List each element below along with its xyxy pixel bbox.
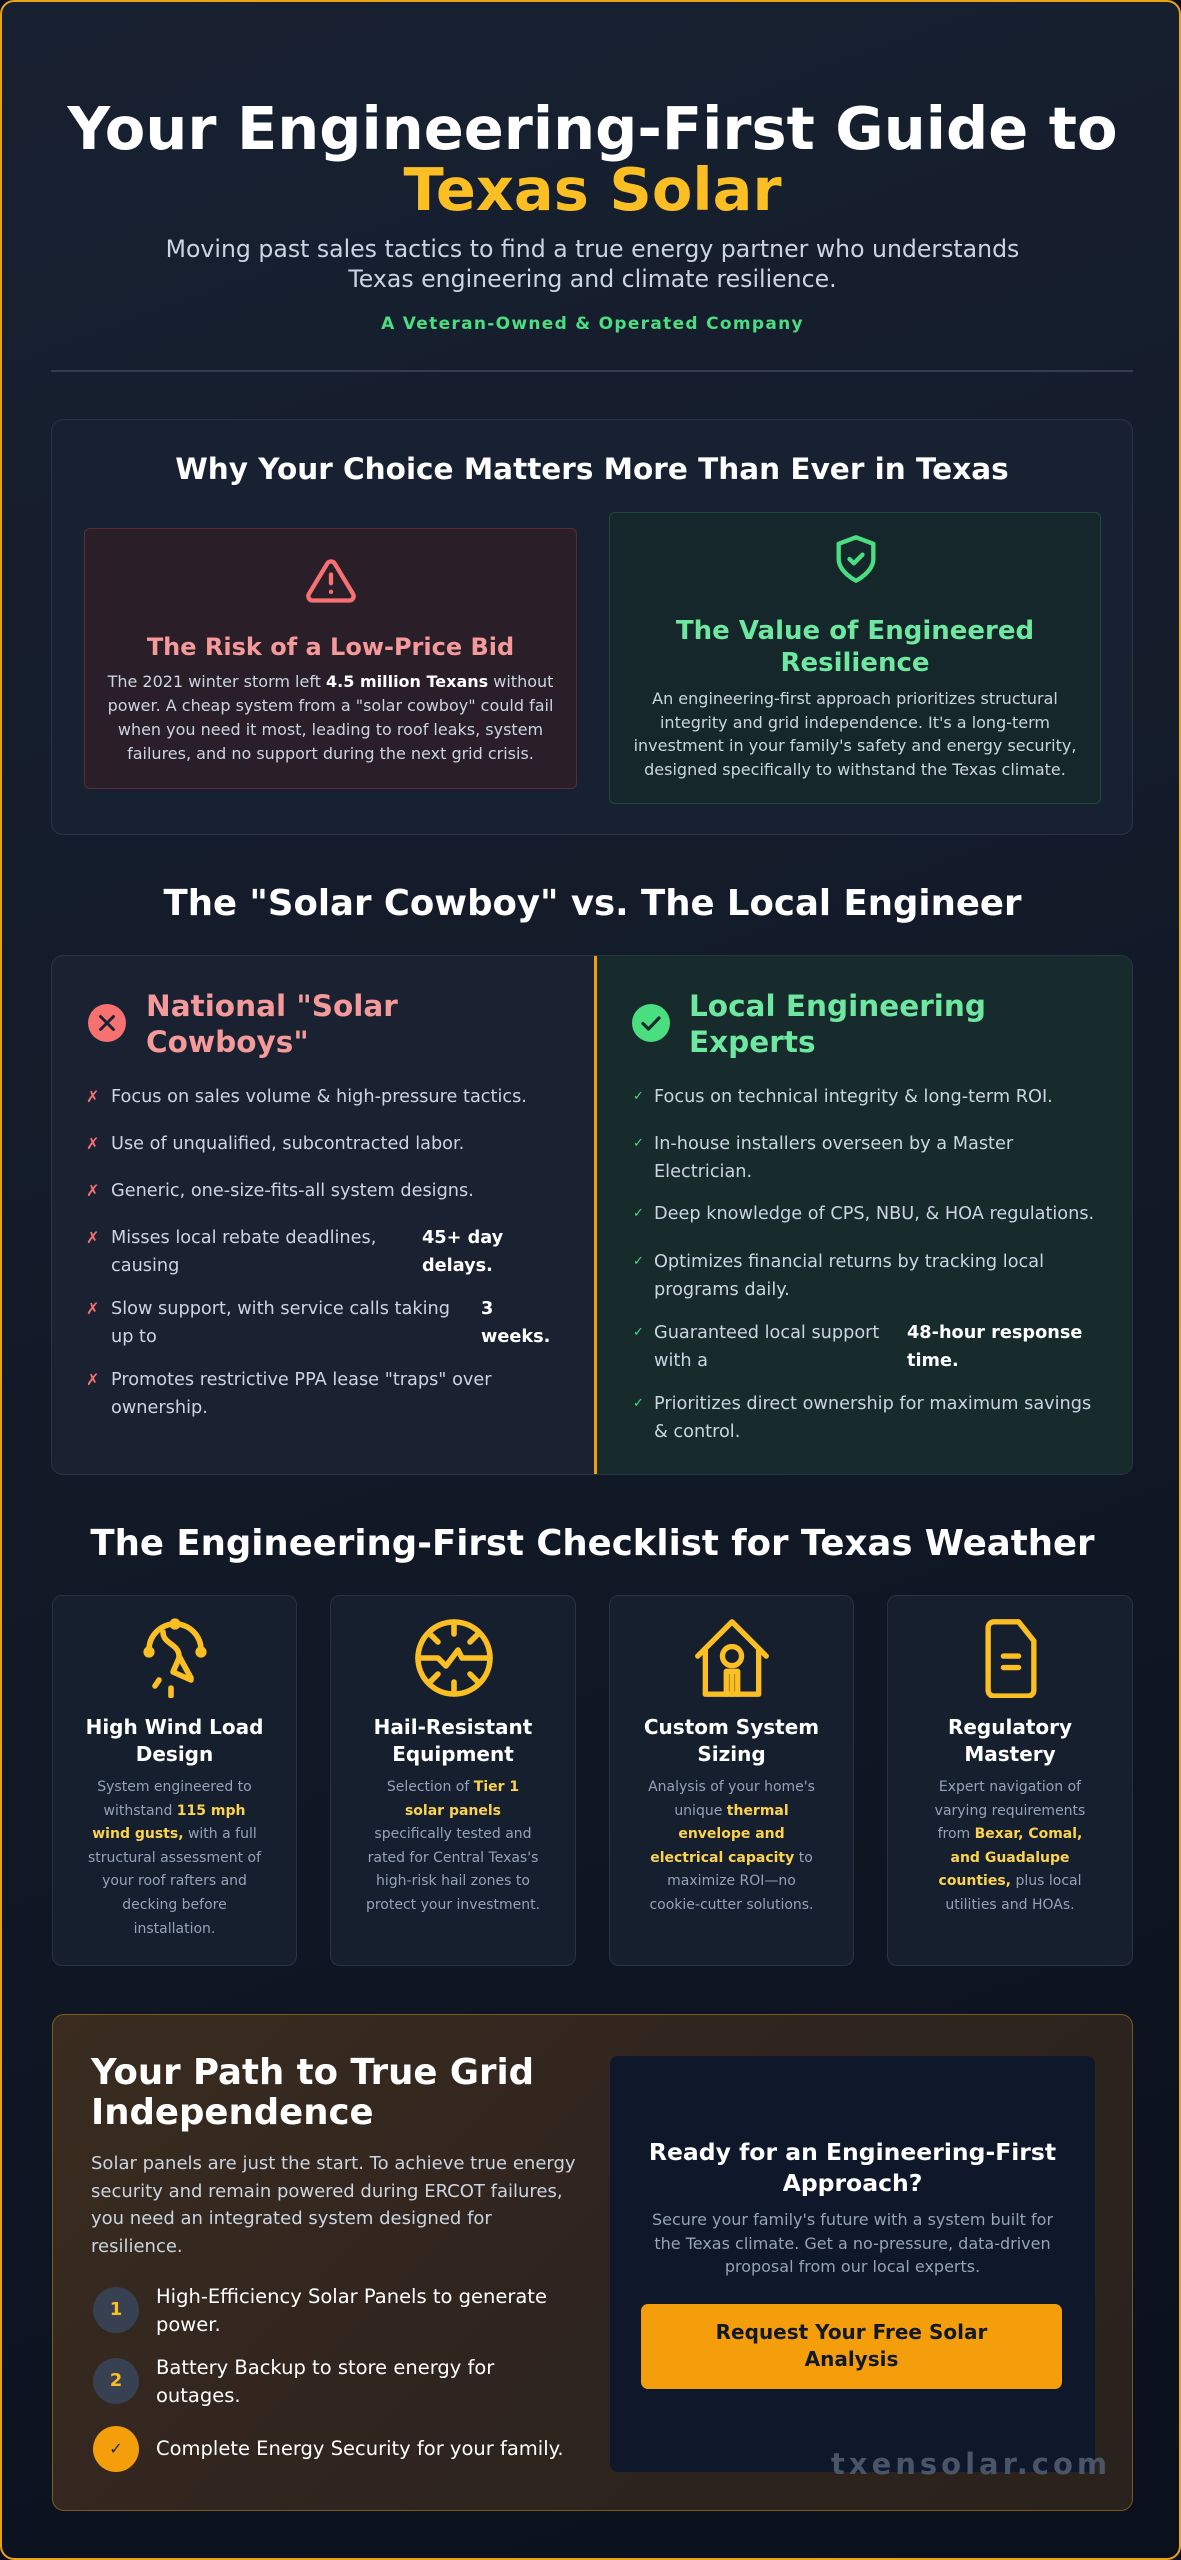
step 2: [93, 2356, 494, 2406]
text: risk: power. A cheap system from a "solar cowboy" could fail: [108, 696, 553, 715]
text: cta: proposal from our local experts.: [725, 2257, 980, 2276]
watermark: txensolar.com: [831, 2447, 1111, 2481]
panel: comparison: [51, 955, 1133, 1475]
title: Your Engineering-First Guide to: [68, 94, 1118, 163]
step 1: power.: [156, 2312, 221, 2336]
panel: why your choice matters: [51, 419, 1133, 835]
text: hail: protect your investment.: [366, 1897, 540, 1913]
text: path intro: you need an integrated system designed for: [91, 2208, 492, 2229]
list: local strengths: ✓: [633, 1089, 644, 1104]
text: wind: your roof rafters and: [102, 1873, 247, 1889]
icon: house: [695, 1619, 769, 1697]
title: wind: High Wind Load: [86, 1715, 263, 1739]
text: sizing: Analysis of your home's: [648, 1779, 815, 1795]
subtitle: Texas engineering and climate resilience.: [348, 265, 837, 293]
icon: warning triangle: [306, 559, 356, 603]
icon: shield check: [836, 535, 876, 583]
list: cowboy faults: Generic, one-size-fits-all system designs.: [111, 1181, 474, 1201]
list: local strengths: Electrician.: [654, 1162, 752, 1182]
list: cowboy faults: Focus on sales volume & high-pressure tactics.: [111, 1087, 527, 1107]
icon: wind: [143, 1618, 207, 1698]
list: cowboy faults: [86, 1087, 550, 1418]
heading: solar cowboy vs local engineer: The "Solar Cowboy" vs. The Local Engineer: [163, 883, 1022, 924]
text: value: [634, 689, 1076, 778]
title: hail: Equipment: [392, 1742, 514, 1766]
step 1: [93, 2285, 547, 2336]
text: hail: [366, 1779, 540, 1913]
text: hail: rated for Central Texas's: [368, 1850, 538, 1866]
heading: value: The Value of Engineered: [676, 616, 1034, 646]
title: sizing: Sizing: [697, 1742, 766, 1766]
list: local strengths: time.: [907, 1351, 959, 1371]
text: wind: structural assessment of: [88, 1850, 261, 1866]
heading: cta: Ready for an Engineering-First: [649, 2138, 1056, 2166]
text: hail: high-risk hail zones to: [376, 1873, 530, 1889]
list: cowboy faults: ownership.: [111, 1398, 208, 1418]
list: cowboy faults: 45+ day: [422, 1228, 503, 1248]
list: local strengths: [633, 1087, 1094, 1442]
title: wind: [86, 1715, 263, 1766]
list: cowboy faults: Slow support, with service calls taking: [111, 1299, 450, 1319]
list: cowboy faults: Promotes restrictive PPA lease "traps" over: [111, 1370, 492, 1390]
list: local strengths: Guaranteed local support: [654, 1323, 879, 1343]
title: hail: Hail-Resistant: [374, 1715, 532, 1739]
text: value: integrity and grid independence. It's a long-term: [660, 712, 1050, 732]
heading: risk: The Risk of a Low-Price Bid: [147, 633, 514, 661]
text: regulatory: from Bexar, Comal,: [938, 1826, 1082, 1842]
text: hail: Selection of Tier 1: [387, 1779, 519, 1795]
button: Analysis: [805, 2347, 898, 2371]
veteran tagline: A Veteran-Owned & Operated Company: [381, 314, 804, 334]
list: cowboy faults: ✗: [86, 1087, 99, 1106]
heading: national cowboys: Cowboys": [146, 1025, 309, 1059]
card: regulatory mastery: [887, 1595, 1133, 1966]
heading: national cowboys: National "Solar: [146, 989, 398, 1023]
step 2: 2: [110, 2370, 122, 2391]
list: cowboy faults: Misses local rebate deadlines,: [111, 1228, 376, 1248]
text: sizing: unique thermal: [674, 1803, 789, 1819]
title: wind: Design: [136, 1742, 213, 1766]
title: sizing: [644, 1715, 819, 1766]
text: regulatory: [935, 1779, 1085, 1913]
title: sizing: Custom System: [644, 1715, 819, 1739]
text: risk: failures, and no support during the next grid crisis.: [127, 744, 534, 763]
title: [67, 94, 1118, 224]
list: cowboy faults: ✗: [86, 1370, 99, 1389]
text: hail: solar panels: [405, 1803, 501, 1819]
step 2: outages.: [156, 2384, 241, 2406]
heading: path: [90, 2052, 534, 2133]
list: local strengths: ✓: [633, 1206, 644, 1221]
list: cowboy faults: Use of unqualified, subcontracted labor.: [111, 1134, 464, 1154]
list: local strengths: programs daily.: [654, 1280, 790, 1300]
panel: path to grid independence: [52, 2014, 1133, 2511]
title: regulatory: Mastery: [964, 1742, 1056, 1766]
text: regulatory: counties, plus local: [939, 1873, 1081, 1889]
step 1: High-Efficiency Solar Panels to generate: [156, 2285, 547, 2308]
title: regulatory: [948, 1715, 1072, 1766]
title: regulatory: Regulatory: [948, 1715, 1072, 1739]
card: risk of low-price bid: [84, 528, 577, 789]
text: sizing: [648, 1779, 815, 1913]
subtitle: [166, 235, 1019, 293]
text: wind: decking before: [122, 1897, 227, 1913]
list: local strengths: ✓: [633, 1136, 644, 1151]
text: value: investment in your family's safety and energy security,: [634, 736, 1076, 755]
text: regulatory: utilities and HOAs.: [945, 1897, 1075, 1913]
text: risk: [108, 672, 553, 763]
list: cowboy faults: causing: [111, 1256, 179, 1276]
button: Request Your Free Solar: [716, 2320, 987, 2344]
text: value: An engineering-first approach prioritizes structural: [652, 689, 1058, 708]
column: local engineering experts: [632, 989, 1094, 1442]
list: local strengths: In-house installers overseen by a Master: [654, 1134, 1013, 1154]
list: local strengths: Prioritizes direct ownership for maximum savings: [654, 1394, 1091, 1414]
list: cowboy faults: ✗: [86, 1228, 99, 1247]
list: local strengths: 48-hour response: [907, 1323, 1082, 1343]
text: regulatory: and Guadalupe: [951, 1850, 1069, 1866]
text: risk: when you need it most, leading to roof leaks, system: [118, 720, 543, 739]
step 3: Complete Energy Security for your family.: [156, 2437, 564, 2460]
heading: local experts: [689, 989, 986, 1059]
heading: why choice matters: Why Your Choice Matters More Than Ever in Texas: [175, 452, 1009, 486]
text: regulatory: varying requirements: [935, 1803, 1085, 1819]
card: high wind load design: [52, 1595, 297, 1966]
step 3: ✓: [109, 2439, 123, 2458]
text: sizing: electrical capacity to: [650, 1850, 813, 1866]
list: cowboy faults: up to: [111, 1327, 157, 1347]
card: hail-resistant equipment: [330, 1595, 576, 1966]
step 1: 1: [110, 2299, 122, 2320]
text: path intro: security and remain powered during ERCOT failures,: [91, 2180, 563, 2202]
list: cowboy faults: ✗: [86, 1181, 99, 1200]
list: cowboy faults: weeks.: [481, 1327, 550, 1347]
icon: document: [985, 1619, 1037, 1698]
icon: green check circle: [632, 1004, 670, 1042]
text: wind: [88, 1779, 262, 1937]
icon: red x circle: [88, 1004, 126, 1042]
text: path intro: Solar panels are just the start. To achieve true energy: [91, 2153, 576, 2174]
list: local strengths: ✓: [633, 1325, 644, 1340]
list: local strengths: & control.: [654, 1422, 740, 1442]
cta card: [610, 2056, 1095, 2472]
text: wind: System engineered to: [97, 1779, 252, 1795]
heading: cta: [649, 2138, 1056, 2197]
list: local strengths: Deep knowledge of CPS, NBU, & HOA regulations.: [654, 1204, 1094, 1224]
heading: national cowboys: [146, 989, 398, 1059]
list: cowboy faults: ✗: [86, 1299, 99, 1318]
list: cowboy faults: ✗: [86, 1134, 99, 1153]
text: cta: [652, 2210, 1054, 2276]
text: value: designed specifically to withstand the Texas climate.: [644, 760, 1066, 778]
text: wind: installation.: [134, 1921, 215, 1937]
text: cta: the Texas climate. Get a no-pressure, data-driven: [654, 2234, 1051, 2252]
text: hail: specifically tested and: [374, 1826, 532, 1842]
text: sizing: cookie-cutter solutions.: [649, 1897, 814, 1913]
text: wind: withstand 115 mph: [104, 1803, 245, 1819]
text: regulatory: Expert navigation of: [939, 1779, 1081, 1795]
text: sizing: maximize ROI—no: [667, 1873, 796, 1889]
text: sizing: envelope and: [678, 1826, 785, 1842]
text: wind: wind gusts, with a full: [92, 1826, 257, 1842]
heading: local experts: Local Engineering: [689, 989, 986, 1023]
heading: cta: Approach?: [783, 2169, 922, 2197]
title: Texas Solar: [403, 155, 782, 224]
text: cta: Secure your family's future with a system built for: [652, 2210, 1053, 2229]
subtitle: Moving past sales tactics to find a true energy partner who understands: [166, 235, 1019, 263]
heading: path: Your Path to True Grid: [91, 2052, 534, 2093]
list: cowboy faults: delays.: [422, 1256, 493, 1276]
text: risk: The 2021 winter storm left 4.5 million Texans without: [108, 672, 553, 691]
list: local strengths: with a: [654, 1351, 708, 1371]
heading: local experts: Experts: [689, 1025, 816, 1059]
heading: value: [676, 616, 1034, 678]
column: national solar cowboys: [86, 989, 550, 1418]
button: [641, 2304, 1062, 2389]
step 2: Battery Backup to store energy for: [156, 2356, 494, 2379]
list: local strengths: ✓: [633, 1396, 644, 1411]
icon: hail dial: [415, 1619, 493, 1697]
text: path intro: resilience.: [91, 2236, 183, 2256]
heading: value: Resilience: [780, 648, 930, 678]
list: local strengths: ✓: [633, 1254, 644, 1269]
heading: checklist: The Engineering-First Checklist for Texas Weather: [90, 1523, 1095, 1564]
list: cowboy faults: 3: [481, 1299, 493, 1319]
title: hail: [374, 1715, 532, 1766]
list: local strengths: Optimizes financial returns by tracking local: [654, 1252, 1044, 1272]
list: local strengths: Focus on technical integrity & long-term ROI.: [654, 1087, 1053, 1107]
heading: path: Independence: [91, 2092, 374, 2133]
text: path intro: [91, 2153, 576, 2256]
card: value of engineered resilience: [609, 512, 1101, 804]
card: custom system sizing: [609, 1595, 854, 1966]
step 3: [93, 2426, 564, 2472]
